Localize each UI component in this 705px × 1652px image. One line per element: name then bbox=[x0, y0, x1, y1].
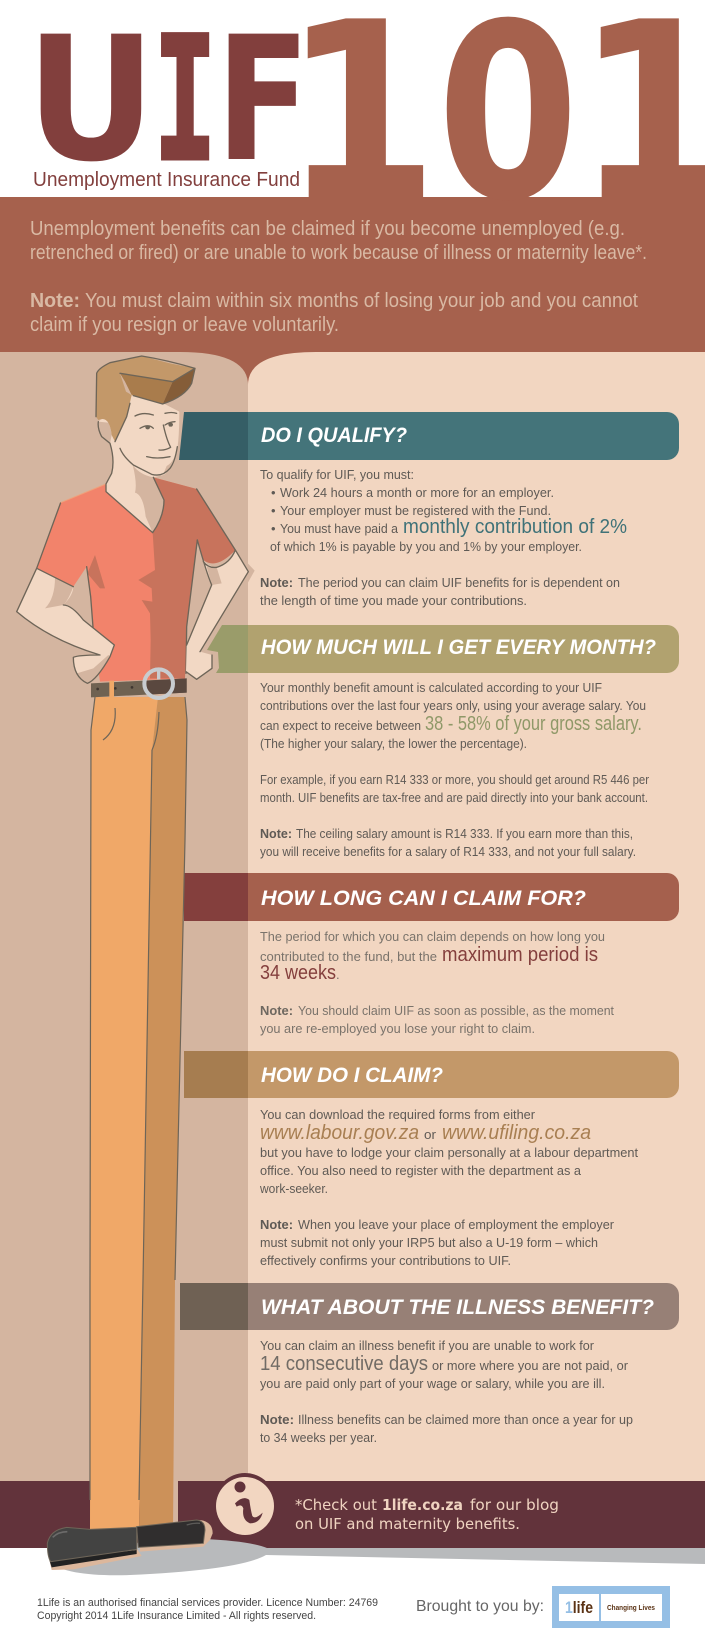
hair bbox=[96, 356, 195, 442]
text block: do I qualify: • bbox=[271, 503, 276, 518]
section bar: how much bbox=[207, 625, 679, 673]
heading: DO I QUALIFY? bbox=[261, 424, 407, 447]
text block: how much: month. UIF benefits are tax-free and are paid directly into your bank account. bbox=[260, 790, 648, 805]
intro text: Note: bbox=[30, 290, 80, 312]
back shoe bbox=[137, 1520, 213, 1552]
callout: blog: 1life.co.za bbox=[382, 1496, 463, 1514]
intro text: You must claim within six months of losing your job and you cannot bbox=[85, 290, 638, 312]
text block: how long: maximum period is bbox=[442, 944, 598, 966]
shoes bbox=[47, 1520, 213, 1570]
text block: do I qualify: of which 1% is payable by you and 1% by your employer. bbox=[270, 539, 582, 554]
text block: how do I claim: office. You also need to register with the department as a bbox=[260, 1163, 582, 1178]
text block: how much: contributions over the last four years only, using your average salary. You bbox=[260, 698, 646, 713]
heading: HOW MUCH WILL I GET EVERY MONTH? bbox=[261, 636, 656, 659]
intro text bbox=[30, 218, 647, 336]
text block: how long bbox=[260, 929, 614, 1036]
text block: do I qualify: You must have paid a bbox=[280, 521, 399, 536]
text block: how long: 34 weeks bbox=[260, 962, 336, 984]
figure: man bbox=[17, 356, 255, 1570]
icon: info bbox=[214, 1473, 276, 1535]
text block: how much: Your monthly benefit amount is calculated according to your UIF bbox=[260, 680, 602, 695]
text block: how long: contributed to the fund, but the bbox=[260, 949, 437, 964]
body drawing bbox=[17, 356, 255, 698]
left background panel bbox=[0, 352, 248, 1481]
section bar: illness benefit bbox=[180, 1283, 679, 1330]
callout: blog: on UIF and maternity benefits. bbox=[295, 1515, 520, 1533]
legal text: 1Life is an authorised financial services provider. Licence Number: 24769 bbox=[37, 1597, 378, 1609]
shirt bbox=[37, 477, 235, 682]
front shoe bbox=[47, 1527, 142, 1570]
floor shadow bbox=[50, 1539, 705, 1575]
section bar: do I qualify bbox=[179, 412, 679, 460]
text block: how do I claim bbox=[259, 1107, 638, 1268]
text block: how do I claim: Note: bbox=[260, 1217, 293, 1232]
footer band bbox=[0, 1481, 705, 1548]
text block: how do I claim: or bbox=[424, 1127, 437, 1142]
text block: do I qualify: The period you can claim UIF benefits for is dependent on bbox=[298, 575, 620, 590]
callout: blog: for our blog bbox=[470, 1496, 559, 1514]
text block: illness benefit: or more where you are not paid, or bbox=[432, 1358, 629, 1373]
legal text bbox=[37, 1597, 378, 1622]
left arm bbox=[17, 568, 114, 683]
callout: blog bbox=[295, 1496, 559, 1533]
text block: how much: (The higher your salary, the lower the percentage). bbox=[260, 736, 527, 751]
text block: how much bbox=[260, 680, 650, 859]
text block: how do I claim: www.labour.gov.za bbox=[260, 1122, 419, 1144]
text block: how much: The ceiling salary amount is R14 333. If you earn more than this, bbox=[296, 826, 633, 841]
text block: do I qualify: To qualify for UIF, you must: bbox=[260, 467, 414, 482]
text block: how much: For example, if you earn R14 333 or more, you should get around R5 446 per bbox=[260, 772, 650, 787]
trousers bbox=[90, 697, 187, 1530]
text block: illness benefit: you are paid only part of your wage or salary, while you are ill. bbox=[260, 1376, 605, 1391]
text block: how do I claim: must submit not only your IRP5 but also a U-19 form – which bbox=[260, 1235, 598, 1250]
text block: how long: Note: bbox=[260, 1003, 293, 1018]
text block: do I qualify: • bbox=[271, 521, 276, 536]
text block: how do I claim: but you have to lodge your claim personally at a labour department bbox=[260, 1145, 638, 1160]
brought to you by: Brought to you by: bbox=[416, 1598, 544, 1615]
heading: WHAT ABOUT THE ILLNESS BENEFIT? bbox=[261, 1296, 654, 1319]
title: UIF: U bbox=[26, 1, 156, 200]
right arm bbox=[186, 540, 255, 679]
buckle bbox=[144, 669, 173, 698]
right background panel bbox=[248, 352, 705, 1481]
legal text: Copyright 2014 1Life Insurance Limited - All rights reserved. bbox=[37, 1610, 316, 1622]
text block: how much: you will receive benefits for a salary of R14 333, and not your full salary. bbox=[260, 844, 636, 859]
heading: HOW LONG CAN I CLAIM FOR? bbox=[261, 887, 586, 910]
text block: do I qualify: • bbox=[271, 485, 276, 500]
intro band bbox=[0, 197, 705, 487]
belt bbox=[91, 678, 187, 697]
intro text: claim if you resign or leave voluntarily. bbox=[30, 314, 339, 336]
text block: do I qualify: Work 24 hours a month or more for an employer. bbox=[280, 485, 554, 500]
text block: how much: 38 - 58% of your gross salary. bbox=[425, 713, 642, 735]
text block: how much: can expect to receive between bbox=[260, 718, 421, 733]
text block: illness benefit: Illness benefits can be claimed more than once a year for up bbox=[298, 1412, 633, 1427]
text block: do I qualify: Your employer must be registered with the Fund. bbox=[280, 503, 551, 518]
title: UIF bbox=[26, 0, 310, 200]
section bar: how long bbox=[184, 873, 679, 921]
text block: do I qualify: the length of time you made your contributions. bbox=[260, 593, 527, 608]
logo: 1Life bbox=[552, 1586, 670, 1628]
text block: do I qualify bbox=[260, 467, 627, 608]
heading: HOW DO I CLAIM? bbox=[261, 1064, 443, 1087]
callout: blog: *Check out bbox=[295, 1496, 377, 1514]
title: UIF: F bbox=[216, 0, 310, 200]
title: UIF: I bbox=[153, 0, 217, 200]
text block: illness benefit: You can claim an illness benefit if you are unable to work for bbox=[260, 1338, 595, 1353]
text block: how long: You should claim UIF as soon as possible, as the moment bbox=[298, 1003, 614, 1018]
text block: do I qualify: monthly contribution of 2% bbox=[403, 516, 627, 538]
text block: illness benefit: 14 consecutive days bbox=[260, 1353, 428, 1375]
intro text: Unemployment benefits can be claimed if you become unemployed (e.g. bbox=[30, 218, 625, 240]
text block: how do I claim: You can download the required forms from either bbox=[260, 1107, 536, 1122]
section bar: how do I claim bbox=[184, 1051, 679, 1098]
text block: how do I claim: www.ufiling.co.za bbox=[442, 1122, 591, 1144]
subtitle: Unemployment Insurance Fund bbox=[33, 169, 300, 191]
text block: how do I claim: work-seeker. bbox=[259, 1181, 328, 1196]
text block: how long: . bbox=[336, 967, 340, 982]
logo: 1Life: Changing Lives bbox=[607, 1603, 655, 1612]
text block: how long: The period for which you can claim depends on how long you bbox=[260, 929, 605, 944]
text block: how much: Note: bbox=[260, 826, 292, 841]
text block: how do I claim: effectively confirms your contributions to UIF. bbox=[260, 1253, 511, 1268]
text block: how do I claim: When you leave your place of employment the employer bbox=[298, 1217, 615, 1232]
text block: illness benefit bbox=[260, 1338, 633, 1445]
text block: do I qualify: Note: bbox=[260, 575, 293, 590]
title: 101 bbox=[282, 0, 705, 255]
neck and face bbox=[98, 393, 179, 533]
text block: how long: you are re-employed you lose your right to claim. bbox=[260, 1021, 535, 1036]
text block: illness benefit: to 34 weeks per year. bbox=[260, 1430, 377, 1445]
text block: illness benefit: Note: bbox=[260, 1412, 294, 1427]
logo: 1Life: 1life bbox=[565, 1598, 593, 1617]
